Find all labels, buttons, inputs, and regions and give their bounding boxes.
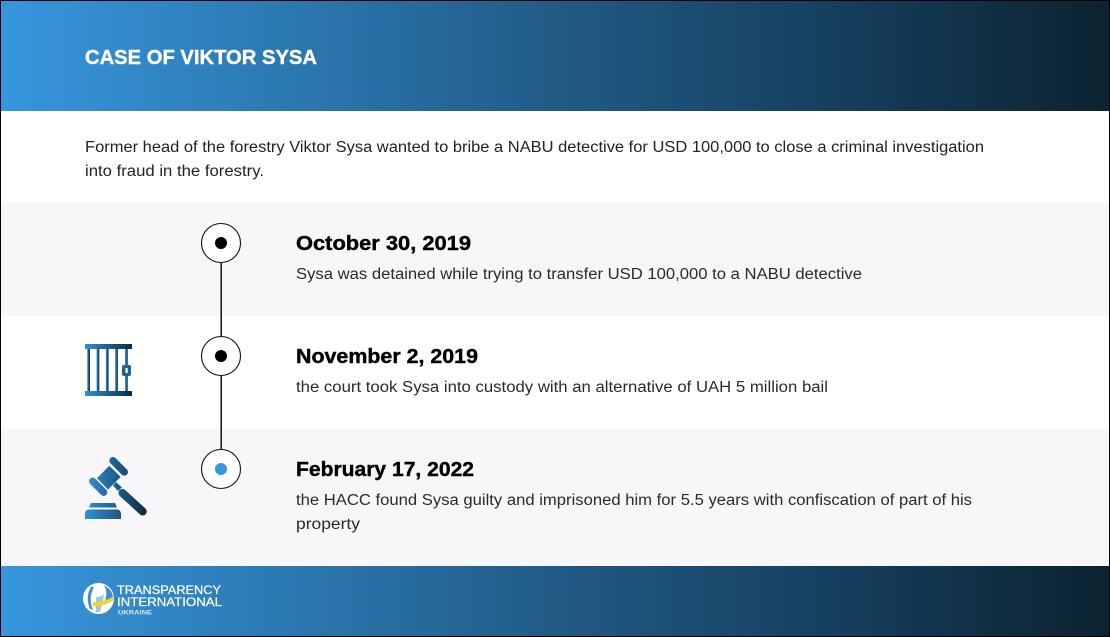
- event 1: [296, 233, 862, 283]
- event 1: Sysa was detained while trying to transfer USD 100,000 to a NABU detective: [296, 266, 862, 283]
- timeline marker 3: [202, 450, 240, 488]
- panel: row 3 background: [0, 429, 1110, 566]
- intro text: into fraud in the forestry.: [85, 163, 264, 180]
- intro text: [85, 139, 984, 180]
- timeline marker 1: [202, 224, 240, 262]
- logo: Transparency International Ukraine: INTERNATIONAL: [117, 595, 222, 609]
- logo: Transparency International Ukraine: TRANSPARENCY: [117, 583, 221, 597]
- panel: header band: [0, 0, 1110, 111]
- event 2: the court took Sysa into custody with an alternative of UAH 5 million bail: [296, 379, 828, 396]
- event 3: [296, 459, 972, 533]
- logo: Transparency International Ukraine: [83, 583, 222, 616]
- event 3: February 17, 2022: [296, 459, 474, 481]
- event 1: October 30, 2019: [296, 233, 471, 255]
- panel: footer band: [0, 566, 1110, 637]
- timeline connector line: [220, 243, 222, 469]
- title: CASE OF VIKTOR SYSA: [85, 46, 317, 69]
- icon: gavel: [85, 461, 143, 519]
- event 3: the HACC found Sysa guilty and imprisoned him for 5.5 years with confiscation of part of his: [296, 492, 972, 509]
- event 3: property: [296, 516, 360, 533]
- intro text: Former head of the forestry Viktor Sysa wanted to bribe a NABU detective for USD 100,000 to close a criminal investigation: [85, 139, 984, 156]
- logo: Transparency International Ukraine: UKRAINE: [118, 610, 152, 616]
- timeline marker 2: [202, 336, 240, 376]
- event 2: [296, 346, 828, 396]
- event 2: November 2, 2019: [296, 346, 478, 368]
- icon: jail bars: [85, 344, 132, 396]
- panel: row 1 background: [0, 203, 1110, 316]
